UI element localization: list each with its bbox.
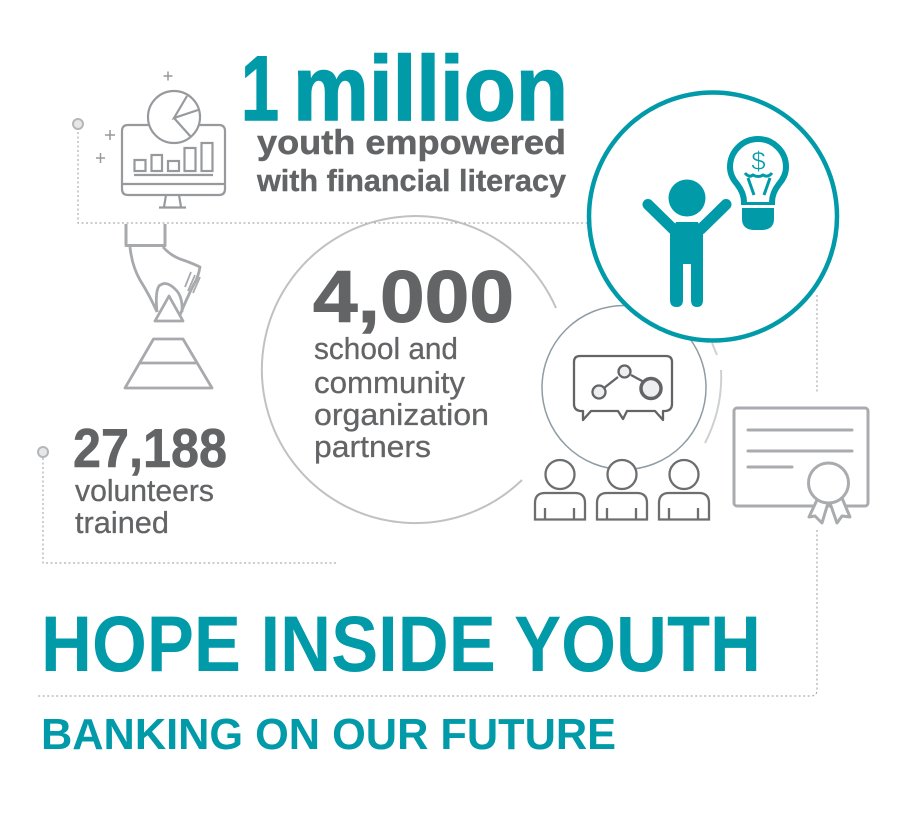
stat: 4,000 partners: organization <box>314 397 489 432</box>
text: with financial literacy: with financial literacy <box>256 163 567 198</box>
stat: 27,188 volunteers: trained <box>75 505 169 540</box>
chart ring: partners circle <box>262 216 556 523</box>
audience people <box>535 460 709 520</box>
icon: teal circle with youth and light bulb <box>589 92 837 340</box>
subtitle: banking on our future: BANKING ON OUR FUTURE <box>41 710 616 759</box>
icon: hand placing pyramid top <box>125 224 212 388</box>
stat: 4,000 partners: 4,000 <box>313 257 514 338</box>
presentation circle <box>542 306 706 470</box>
icon: computer monitor with charts <box>96 72 225 208</box>
stat: 4,000 partners <box>313 257 514 464</box>
outer arcs <box>705 343 721 443</box>
light bulb with dollar sign <box>730 139 786 230</box>
title: hope inside youth: HOPE INSIDE YOUTH <box>41 599 761 688</box>
stat: 27,188 volunteers <box>73 417 227 540</box>
icon: group presentation <box>535 306 721 520</box>
text: youth empowered: youth empowered <box>257 124 566 162</box>
youth figure <box>648 180 726 307</box>
heading: 1 million: 1 <box>241 38 279 140</box>
light bulb with dollar sign: $ <box>751 146 766 176</box>
stat: 27,188 volunteers: 27,188 <box>73 417 227 479</box>
stat: 27,188 volunteers: volunteers <box>75 473 214 508</box>
heading: 1 million: million <box>293 38 568 140</box>
connector: volunteers dotted line <box>38 447 338 563</box>
icon: certificate <box>734 408 868 523</box>
connector: top dotted line <box>73 119 590 223</box>
stat: 4,000 partners: school and <box>314 331 458 366</box>
stat: 4,000 partners: community <box>314 365 465 400</box>
connector: right dotted line <box>37 295 817 696</box>
speech bubble with network <box>574 356 672 420</box>
stat: 4,000 partners: partners <box>314 429 431 464</box>
teal ring <box>589 92 837 340</box>
